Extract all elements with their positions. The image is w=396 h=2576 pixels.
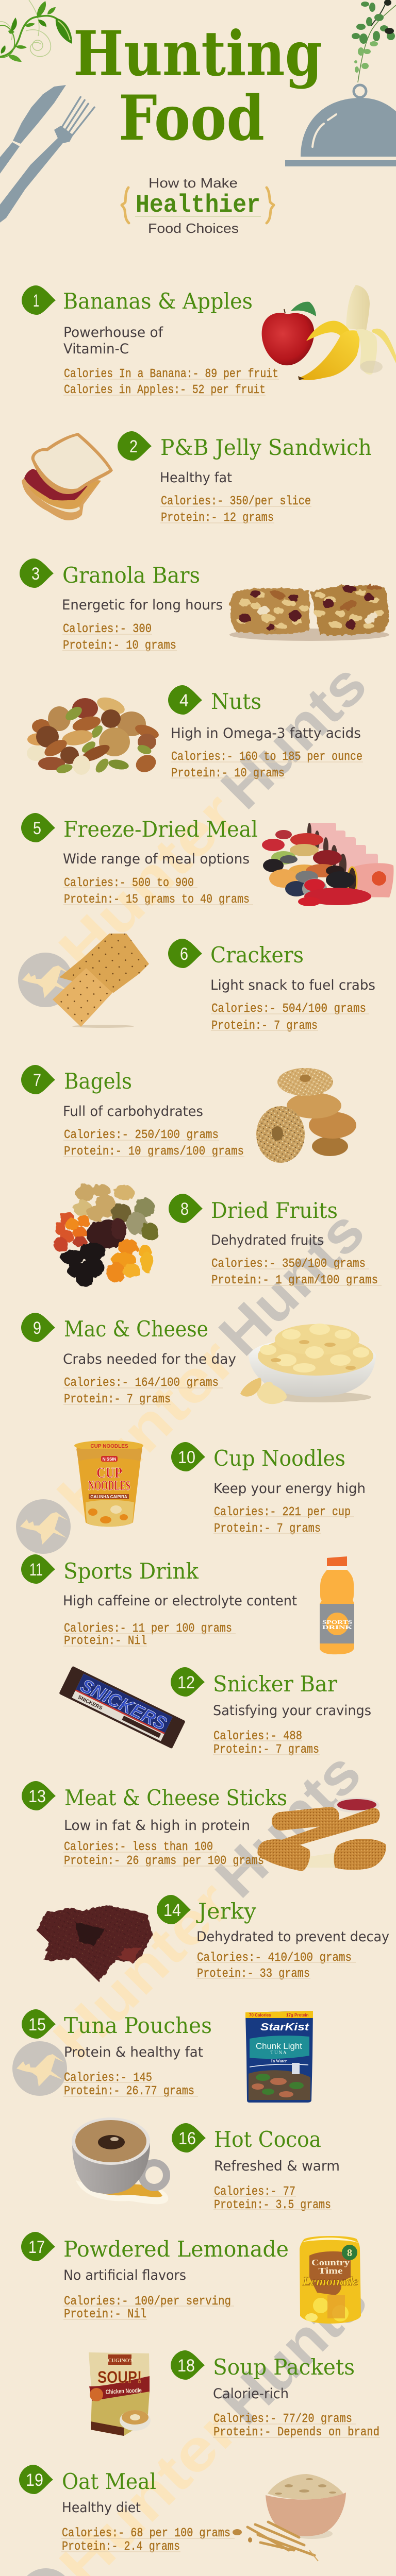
heading: Crackers <box>210 942 304 968</box>
description: Protein & healthy fat <box>64 2044 203 2060</box>
icon: bagels <box>256 1068 356 1163</box>
panel: 4 Nuts <box>27 685 363 781</box>
panel: 15 Tuna Pouches <box>22 2009 313 2103</box>
stats: Calories:- 350/100 grams <box>211 1257 366 1271</box>
panel: 11 Sports Drink <box>21 1554 354 1654</box>
description: Dehydrated to prevent decay <box>196 1929 389 1945</box>
badge 4: 4 <box>179 691 189 710</box>
stats: Protein:- 2.4 grams <box>62 2540 180 2554</box>
description: Light snack to fuel crabs <box>210 977 375 993</box>
panel: 17 Powdered Lemonade <box>21 2232 361 2324</box>
watermark 1: Hunter <box>46 781 250 984</box>
badge 9: 9 <box>33 1318 41 1338</box>
description: High caffeine or electrolyte content <box>63 1593 297 1609</box>
badge 19: 19 <box>26 2470 43 2490</box>
heading: Granola Bars <box>62 563 200 588</box>
subtitle: Food Choices <box>148 221 239 236</box>
icon: cheese sticks <box>257 1798 386 1871</box>
stats <box>63 876 253 907</box>
stats <box>63 1376 223 1406</box>
badge 4 <box>168 685 202 715</box>
icon: tuna pouch: 70 Calories <box>249 2013 271 2018</box>
stats: Calories:- 11 per 100 grams <box>64 1622 232 1636</box>
stats: Calories In a Banana:- 89 per fruit <box>64 367 278 381</box>
description: Healthy fat <box>160 470 232 486</box>
heading: Hot Cocoa <box>214 2127 321 2152</box>
icon: soup packet: SOUP! <box>97 2368 142 2386</box>
icon: sports drink bottle: DRINK <box>322 1624 353 1631</box>
badge 17: 17 <box>28 2238 45 2257</box>
icon: soup packet <box>89 2352 151 2436</box>
description <box>63 325 163 357</box>
icon: sports drink bottle <box>320 1556 354 1654</box>
stats <box>213 2185 332 2212</box>
panel: 6 Crackers <box>53 934 375 1033</box>
stats: Calories:- less than 100 <box>64 1840 213 1854</box>
watermark 4 <box>5 2267 380 2576</box>
stats <box>63 2071 198 2098</box>
description: Satisfying your cravings <box>213 1703 371 1719</box>
panel: 1 Bananas & Apples <box>22 285 396 397</box>
badge 13: 13 <box>28 1787 46 1806</box>
heading: Bagels <box>64 1069 132 1094</box>
heading: Soup Packets <box>213 2354 355 2380</box>
badge 7: 7 <box>33 1071 41 1090</box>
stats <box>211 1002 369 1033</box>
stats: Protein:- 10 grams <box>171 767 285 781</box>
icon: cup noodles: NISSIN <box>103 1457 117 1462</box>
stats: Protein:- 33 grams <box>197 1967 310 1981</box>
icon: top-left vine <box>0 0 72 62</box>
heading: Jerky <box>196 1899 256 1924</box>
heading: Mac & Cheese <box>64 1316 208 1342</box>
stats: Calories:- 145 <box>64 2071 152 2085</box>
stats: Calories:- 504/100 grams <box>211 1002 366 1016</box>
panel: 2 P&B Jelly Sandwich <box>22 431 372 525</box>
badge 3 <box>20 558 54 588</box>
stats <box>213 2412 380 2439</box>
stats <box>213 1505 354 1536</box>
badge 3: 3 <box>31 564 40 584</box>
heading: Freeze-Dried Meal <box>63 817 258 842</box>
stats: Protein:- 26.77 grams <box>64 2084 194 2098</box>
icon: soup packet: Chicken Noodle <box>105 2386 142 2396</box>
stats <box>61 2527 235 2554</box>
badge 2: 2 <box>129 437 138 456</box>
panel: 14 Jerky <box>36 1895 389 1981</box>
badge 17 <box>21 2232 55 2261</box>
badge 12 <box>171 1667 205 1697</box>
stats <box>160 495 311 525</box>
badge 16 <box>172 2123 206 2153</box>
panel: 18 Soup Packets <box>89 2350 380 2439</box>
stats <box>196 1951 356 1981</box>
icon: sports drink bottle: SPORTS <box>322 1619 352 1625</box>
badge 12: 12 <box>177 1673 195 1692</box>
panel: 9 Mac & Cheese <box>21 1313 376 1406</box>
title: Hunting <box>73 18 322 90</box>
icon: tuna pouch: TUNA <box>270 2050 288 2055</box>
description: Keep your energy high <box>213 1481 366 1497</box>
badge 5: 5 <box>33 819 41 838</box>
description: Low in fat & high in protein <box>64 1818 250 1834</box>
icon: tuna pouch: In Water <box>271 2059 287 2063</box>
watermark 3: Hunts <box>203 1740 373 1910</box>
icon: lemonade canister <box>300 2236 361 2324</box>
badge 10 <box>171 1442 205 1471</box>
stats: Calories:- 221 per cup <box>214 1505 351 1519</box>
panel: 16 Hot Cocoa <box>72 2117 340 2212</box>
panel: 3 Granola Bars <box>20 558 389 653</box>
panel: 5 Freeze-Dried Meal <box>21 813 393 907</box>
description: Full of carbohydrates <box>63 1104 203 1120</box>
stats: Calories:- 68 per 100 grams <box>62 2527 230 2540</box>
badge 18: 18 <box>177 2356 195 2376</box>
badge 1: 1 <box>33 291 39 311</box>
icon: dried fruits <box>53 1184 158 1287</box>
badge 11: 11 <box>29 1560 43 1580</box>
watermark 2: Hunter <box>44 1327 248 1530</box>
icon: lemonade canister: Lemonade <box>302 2275 358 2289</box>
badge 9 <box>21 1313 55 1342</box>
watermark 3: Hunter <box>41 1869 244 2072</box>
icon: hot cocoa cup <box>72 2117 168 2204</box>
icon: lemonade canister: Time <box>319 2266 343 2276</box>
stats: Protein:- 12 grams <box>161 511 274 525</box>
description: Refreshed & warm <box>214 2158 340 2174</box>
panel: 13 Meat & Cheese Sticks <box>22 1781 386 1871</box>
icon: apple and banana <box>262 285 396 380</box>
stats <box>63 1622 236 1648</box>
icon: cup noodles: GALINHA CAIPIRA <box>90 1495 127 1499</box>
stats <box>63 1840 264 1868</box>
watermark 1 <box>4 651 379 1026</box>
stats: Protein:- 10 grams/100 grams <box>64 1145 244 1159</box>
icon: oatmeal bowl <box>233 2474 346 2561</box>
stats <box>171 750 363 781</box>
icon: cup noodles: CUP NOODLES <box>90 1444 128 1449</box>
heading: Nuts <box>211 689 261 714</box>
badge 10: 10 <box>178 1448 195 1467</box>
icon: tuna pouch: Chunk Light <box>256 2041 302 2051</box>
stats <box>63 367 279 397</box>
title <box>73 18 322 155</box>
icon: soup packet: CUGINO'S <box>108 2358 134 2364</box>
subtitle <box>122 175 274 236</box>
badge 8: 8 <box>180 1199 189 1219</box>
stats: Calories:- 160 to 185 per ounce <box>171 750 362 764</box>
icon: lemonade canister: Country <box>311 2258 350 2267</box>
heading: Meat & Cheese Sticks <box>64 1785 287 1810</box>
badge 14 <box>157 1895 191 1924</box>
badge 2 <box>118 431 152 461</box>
stats: Protein:- 7 grams <box>64 1393 171 1406</box>
icon: snickers bar <box>59 1666 186 1749</box>
stats: Protein:- 7 grams <box>214 1522 321 1536</box>
watermark 2 <box>2 1198 377 1572</box>
badge 13 <box>22 1781 56 1810</box>
badge 19 <box>19 2465 53 2494</box>
stats: Calories:- 77/20 grams <box>213 2412 352 2426</box>
badge 11 <box>21 1554 55 1584</box>
stats: Protein:- 26 grams per 100 grams <box>64 1854 264 1868</box>
stats <box>63 1128 244 1159</box>
badge 15 <box>22 2009 56 2039</box>
watermark 3 <box>0 1740 373 2114</box>
icon: sandwich <box>22 433 113 520</box>
badge 7 <box>21 1065 55 1094</box>
stats <box>213 1730 320 1757</box>
heading: P&B Jelly Sandwich <box>160 435 372 460</box>
subtitle: Healthier <box>136 191 260 219</box>
stats: Calories:- 77 <box>214 2185 295 2199</box>
badge 6 <box>168 939 202 968</box>
icon: serving cloche <box>285 85 396 166</box>
badge 8 <box>169 1194 203 1223</box>
icon: cup noodles: CUP <box>96 1465 122 1481</box>
description: No artificial flavors <box>63 2267 186 2283</box>
icon: freeze-dried food cans <box>262 823 393 906</box>
watermark 4: Hunts <box>209 2267 380 2437</box>
badge 1 <box>22 285 56 315</box>
stats: Calories:- 164/100 grams <box>64 1376 219 1390</box>
panel: 12 Snicker Bar <box>59 1666 371 1757</box>
icon: mac and cheese bowl <box>240 1324 376 1404</box>
icon: jerky <box>36 1905 153 1981</box>
stats: Protein:- Nil <box>64 2308 146 2321</box>
stats: Protein:- 10 grams <box>63 639 176 653</box>
icon: tuna pouch: 17g Protein <box>286 2013 309 2018</box>
panel: 7 Bagels <box>21 1065 356 1163</box>
icon: top-right hanging leaves <box>352 0 396 82</box>
heading: Tuna Pouches <box>64 2013 212 2038</box>
heading: Powdered Lemonade <box>63 2236 289 2262</box>
panel: 10 Cup Noodles <box>74 1440 366 1536</box>
description: Vitamin-C <box>63 341 129 357</box>
icon: snickers bar: SNICKERS <box>77 1694 103 1711</box>
badge 15: 15 <box>28 2015 46 2035</box>
title: Food <box>119 82 265 155</box>
stats <box>211 1257 382 1287</box>
watermark 1: Hunts <box>209 651 379 821</box>
heading: Bananas & Apples <box>63 289 253 314</box>
icon: crackers <box>53 934 149 1028</box>
stats: Calories:- 300 <box>63 622 152 636</box>
icon: cup noodles <box>74 1440 143 1527</box>
description: Dehydrated fruits <box>211 1232 324 1248</box>
stats: Calories in Apples:- 52 per fruit <box>64 383 266 397</box>
icon: tuna pouch <box>245 2011 313 2103</box>
icon: lemonade canister: 8 <box>347 2247 352 2259</box>
description: Calorie-rich <box>213 2386 289 2402</box>
icon: mixed nuts <box>27 694 160 775</box>
stats <box>63 2295 234 2321</box>
panel: 8 Dried Fruits <box>53 1184 382 1287</box>
description: Powerhouse of <box>63 325 163 341</box>
heading: Sports Drink <box>63 1558 199 1584</box>
stats: Protein:- Nil <box>64 1634 147 1648</box>
description: Energetic for long hours <box>62 597 223 613</box>
stats: Protein:- 3.5 grams <box>214 2198 331 2212</box>
stats: Calories:- 250/100 grams <box>64 1128 219 1142</box>
stats: Calories:- 500 to 900 <box>64 876 194 890</box>
badge 6: 6 <box>180 944 188 964</box>
stats: Protein:- 15 grams to 40 grams <box>64 893 250 907</box>
stats: Calories:- 100/per serving <box>64 2295 231 2309</box>
icon: snickers bar: SNICKERS <box>77 1674 170 1734</box>
icon: cup noodles: NOODLES <box>88 1478 130 1493</box>
icon: granola bars <box>229 585 389 641</box>
stats: Protein:- 7 grams <box>211 1019 318 1033</box>
description: Crabs needed for the day <box>63 1351 236 1367</box>
description: Wide range of meal options <box>63 851 250 867</box>
description: High in Omega-3 fatty acids <box>171 725 361 741</box>
stats: Calories:- 350/per slice <box>161 495 311 509</box>
heading: Snicker Bar <box>213 1671 338 1697</box>
badge 14: 14 <box>163 1901 181 1920</box>
subtitle: How to Make <box>148 175 238 191</box>
heading: Dried Fruits <box>211 1198 338 1223</box>
stats: Protein:- 7 grams <box>213 1743 319 1757</box>
stats: Calories:- 410/100 grams <box>197 1951 352 1965</box>
stats: Calories:- 488 <box>213 1730 302 1743</box>
icon: tuna pouch: StarKist <box>260 2022 310 2033</box>
icon: knife and fork <box>0 85 95 223</box>
description: Healthy diet <box>62 2500 141 2516</box>
heading: Cup Noodles <box>213 1446 345 1471</box>
badge 18 <box>171 2350 205 2380</box>
heading: Oat Meal <box>62 2469 156 2494</box>
watermark 2: Hunts <box>207 1198 377 1368</box>
badge 5 <box>21 813 55 842</box>
stats <box>62 622 177 653</box>
badge 16: 16 <box>178 2129 196 2148</box>
panel: 19 Oat Meal <box>19 2465 346 2561</box>
